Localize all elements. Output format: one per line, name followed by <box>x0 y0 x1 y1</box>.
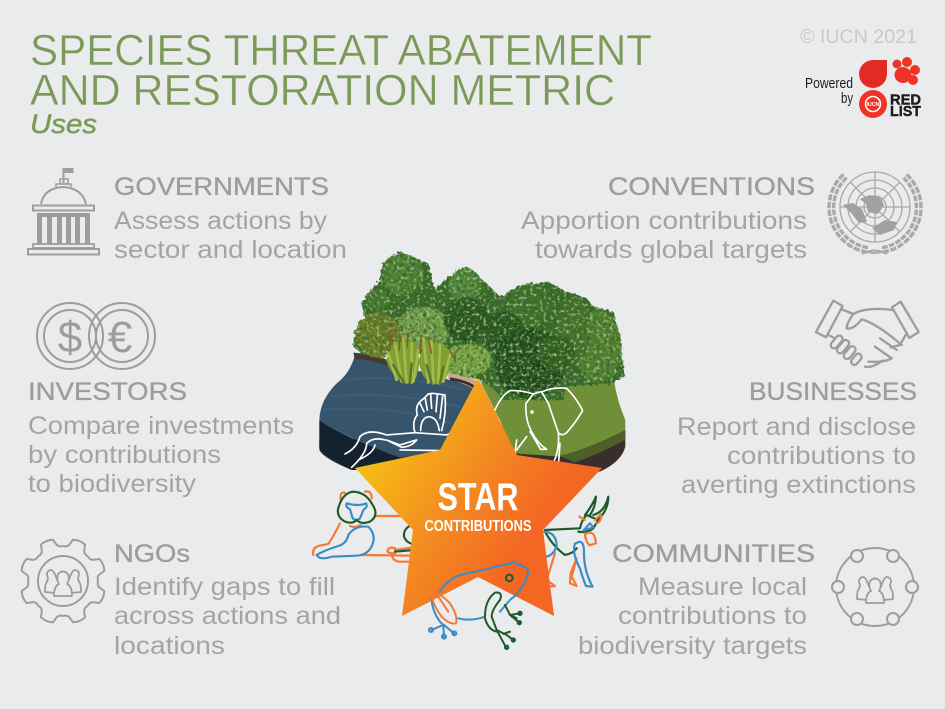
text: businesses <box>677 378 917 499</box>
icon: dollar and euro coins <box>37 303 155 369</box>
icon: dollar and euro coins: € <box>108 313 132 362</box>
title <box>30 26 652 115</box>
text: conventions: towards global targets <box>535 236 807 264</box>
icon: gear with people <box>18 536 108 626</box>
icon: handshake <box>816 301 919 367</box>
logo: powered by IUCN Red List: LIST <box>890 103 921 120</box>
title: AND RESTORATION METRIC <box>30 66 615 115</box>
copyright: © IUCN 2021 <box>800 27 917 48</box>
lion <box>313 491 413 562</box>
logo: powered by IUCN Red List: IUCN <box>866 102 880 108</box>
water surface <box>319 355 480 457</box>
logo: powered by IUCN Red List: Powered <box>805 75 853 92</box>
text: businesses: Report and disclose <box>677 413 916 441</box>
bank <box>353 353 387 366</box>
text: NGOs: NGOs <box>114 540 190 568</box>
icon: UN emblem <box>831 172 919 254</box>
grass side <box>560 430 625 463</box>
star label: STAR <box>438 476 518 519</box>
text: investors: Compare investments <box>28 412 294 440</box>
text: investors: INVESTORS <box>28 378 187 406</box>
text: investors <box>28 378 294 498</box>
logo: powered by IUCN Red List <box>805 57 921 120</box>
text: conventions <box>521 173 815 264</box>
text: NGOs: locations <box>114 632 225 660</box>
logo: powered by IUCN Red List: by <box>841 90 853 107</box>
antelope <box>540 497 608 587</box>
star sublabel: CONTRIBUTIONS <box>424 518 532 535</box>
reeds <box>386 342 453 384</box>
title: SPECIES THREAT ABATEMENT <box>30 26 652 75</box>
icon: government building <box>28 168 99 254</box>
icon: dollar and euro coins: $ <box>58 313 82 362</box>
grass surface <box>480 377 625 457</box>
text: governments <box>114 173 347 264</box>
landscape island <box>319 252 625 472</box>
text: governments: GOVERNMENTS <box>114 173 329 201</box>
soil base <box>319 430 625 472</box>
text: investors: by contributions <box>28 441 221 469</box>
text: conventions: Apportion contributions <box>521 207 807 235</box>
text: NGOs: Identify gaps to fill <box>114 573 335 601</box>
text: communities <box>578 540 815 660</box>
text: investors: to biodiversity <box>28 470 197 498</box>
logo: powered by IUCN Red List: RED <box>890 92 921 108</box>
text: communities: Measure local <box>638 573 807 601</box>
elephant outline <box>495 388 583 467</box>
frog <box>429 562 528 649</box>
text: communities: contributions to <box>618 602 807 630</box>
star <box>355 378 602 616</box>
text: communities: COMMUNITIES <box>612 540 815 568</box>
water side <box>319 420 440 470</box>
text: businesses: averting extinctions <box>681 471 916 499</box>
text: businesses: BUSINESSES <box>749 378 917 406</box>
text: communities: biodiversity targets <box>578 632 807 660</box>
text: NGOs: across actions and <box>114 602 341 630</box>
text: governments: Assess actions by <box>114 207 328 235</box>
animals behind star <box>313 491 608 587</box>
trees <box>353 252 625 400</box>
text: businesses: contributions to <box>727 442 916 470</box>
text: conventions: CONVENTIONS <box>608 173 815 201</box>
icon: community circle <box>832 548 918 626</box>
text: NGOs <box>114 540 341 660</box>
bird outline <box>345 393 474 467</box>
subtitle: Uses <box>30 109 97 139</box>
text: governments: sector and location <box>114 236 347 264</box>
